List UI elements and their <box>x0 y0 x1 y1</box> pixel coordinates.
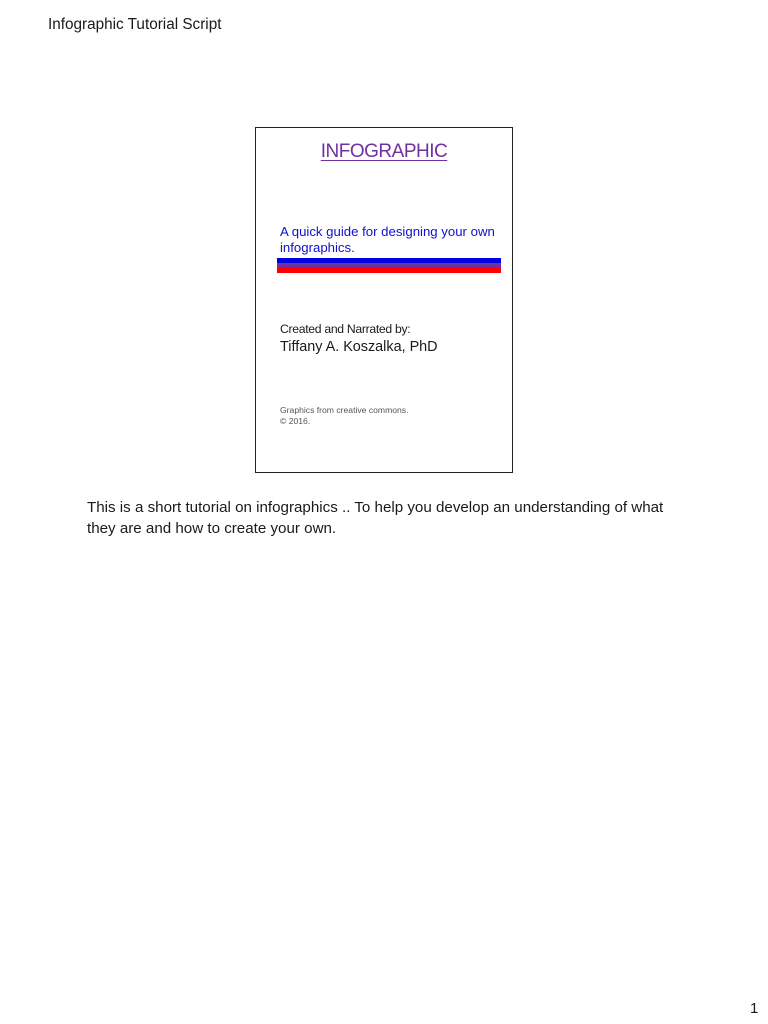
body text: This is a short tutorial on infographics .. To help you develop an understanding of what <box>87 499 663 516</box>
body text <box>87 499 664 537</box>
author credit: Created and Narrated by: <box>280 322 410 336</box>
graphics credit: © 2016. <box>280 416 310 426</box>
header: page title: Infographic Tutorial Script <box>48 16 221 33</box>
body text: they are and how to create your own. <box>87 520 336 537</box>
page number: 1 <box>750 1000 758 1017</box>
slide title: INFOGRAPHIC <box>321 141 447 162</box>
author credit: Tiffany A. Koszalka, PhD <box>280 339 438 355</box>
graphics credit: Graphics from creative commons. <box>280 405 408 415</box>
author credit <box>280 322 438 355</box>
subtitle text: A quick guide for designing your own infographics. <box>280 224 495 255</box>
panel: slide thumbnail <box>255 127 513 473</box>
graphics credit <box>280 405 408 426</box>
decorative colour bars <box>277 258 501 273</box>
